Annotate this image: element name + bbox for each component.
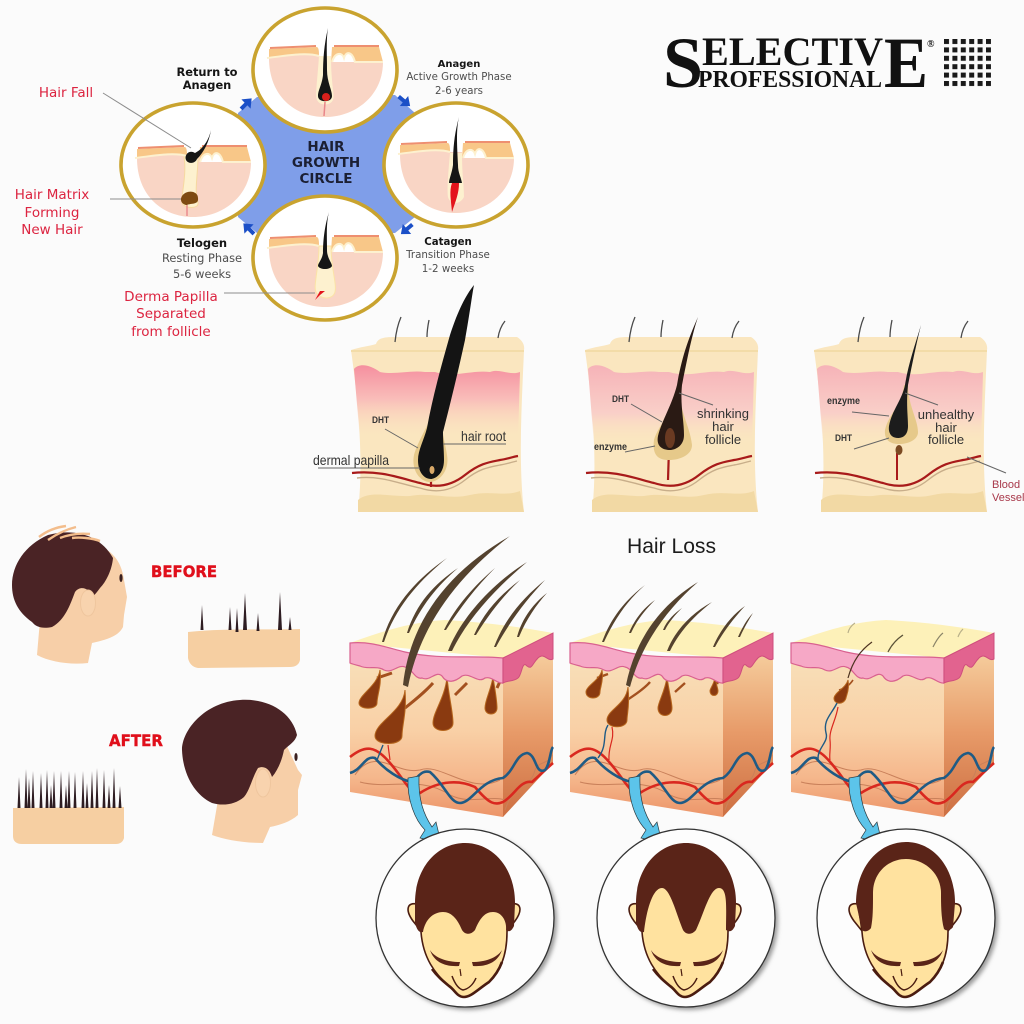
icon: skin sample with dense hair (13, 768, 124, 844)
panel: thinning hair skin block (570, 582, 773, 817)
labels: enzyme, DHT, unhealthy hair follicle, blood vessel: follicle (928, 432, 964, 447)
labels: enzyme, DHT, unhealthy hair follicle, blood vessel: Vessel (992, 492, 1024, 504)
label: catagen: Transition Phase (405, 249, 490, 261)
arrow: to catagen (394, 92, 414, 111)
logo: selective professional: ELECTIV (702, 29, 883, 74)
panel: balding skin block (791, 620, 994, 817)
label: return to anagen: Return to (176, 65, 238, 79)
labels: enzyme, DHT, unhealthy hair follicle, blood vessel: DHT (835, 433, 852, 443)
hair strands (848, 623, 963, 678)
label: hair matrix (15, 187, 181, 238)
labels: DHT, enzyme, shrinking hair follicle: DHT (612, 394, 629, 404)
labels: DHT, hair root, dermal papilla: DHT (372, 415, 389, 425)
panel: unhealthy follicle skin section (814, 317, 1024, 512)
icon: head with receding hairline (597, 829, 778, 1010)
label: return to anagen: Anagen (183, 78, 231, 92)
hair strands (382, 536, 547, 687)
labels: enzyme, DHT, unhealthy hair follicle, blood vessel: unhealthy (918, 407, 975, 422)
label: hair fall (39, 85, 191, 148)
arrow: to telogen (397, 220, 417, 239)
label: anagen: Active Growth Phase (406, 72, 512, 83)
logo: selective professional: S (663, 23, 703, 103)
arrow: return to anagen (236, 94, 256, 114)
panel: hair growth circle (15, 8, 528, 340)
icon: catagen circle (384, 103, 528, 227)
labels: enzyme, DHT, unhealthy hair follicle, blood vessel: Blood (992, 479, 1020, 491)
arrow: block one to head one (408, 776, 441, 843)
icon: anagen circle (253, 8, 397, 132)
arrow: block three to head three (849, 776, 882, 843)
central blue hub (238, 95, 415, 233)
icon: head after treatment (182, 700, 302, 843)
panel: shrinking follicle skin section (585, 317, 758, 512)
icon: head with early hair loss (376, 829, 557, 1010)
label: hair matrix: Forming (25, 205, 79, 221)
arrow: from telogen (239, 219, 259, 239)
label: telogen: 5-6 weeks (173, 267, 231, 281)
logo: selective professional: E (884, 23, 928, 103)
labels: DHT, enzyme, shrinking hair follicle: shrinking (697, 406, 749, 421)
center heading: CIRCLE (299, 171, 353, 187)
label: derma papilla: Separated (136, 306, 206, 322)
label: hair fall: Hair Fall (39, 85, 93, 101)
labels: DHT, enzyme, shrinking hair follicle (594, 393, 749, 453)
label: hair matrix: Hair Matrix (15, 187, 89, 203)
icon: telogen circle (253, 196, 397, 320)
label: catagen: 1-2 weeks (422, 263, 474, 275)
label: derma papilla (124, 289, 315, 340)
logo: selective professional: PROFESSIONAL (698, 67, 882, 93)
icon: skin sample with sparse hair (188, 592, 300, 668)
panel: healthy hair root skin section (313, 285, 524, 512)
icon: head before treatment (12, 526, 127, 664)
logo: selective professional: ® (927, 39, 935, 50)
label: after: AFTER (109, 731, 163, 750)
labels: DHT, hair root, dermal papilla: dermal papilla (313, 452, 389, 468)
label: telogen: Resting Phase (162, 251, 242, 265)
hair strands (602, 582, 753, 687)
label: derma papilla: Derma Papilla (124, 289, 218, 305)
label: before: BEFORE (151, 562, 217, 581)
label: derma papilla: from follicle (131, 324, 211, 340)
label: telogen: Telogen (177, 236, 227, 250)
labels: DHT, hair root, dermal papilla (313, 415, 506, 468)
labels: DHT, hair root, dermal papilla: hair root (461, 428, 506, 444)
center heading: HAIR (307, 139, 345, 155)
icon: head with advanced hair loss (817, 829, 998, 1010)
logo: selective professional (663, 23, 991, 103)
labels: DHT, enzyme, shrinking hair follicle: follicle (705, 432, 741, 447)
heading: hair loss: Hair Loss (627, 535, 716, 558)
labels: DHT, enzyme, shrinking hair follicle: enzyme (594, 442, 627, 453)
labels: enzyme, DHT, unhealthy hair follicle, blood vessel (827, 393, 1024, 504)
center heading: GROWTH (292, 155, 360, 171)
label: catagen: Catagen (424, 237, 472, 248)
label: anagen: 2-6 years (435, 86, 483, 97)
icon: return to anagen circle (121, 103, 265, 227)
arrow: block two to head two (629, 776, 662, 843)
label: anagen: Anagen (438, 59, 480, 70)
labels: enzyme, DHT, unhealthy hair follicle, blood vessel: enzyme (827, 396, 860, 407)
label: hair matrix: New Hair (21, 222, 83, 238)
labels: enzyme, DHT, unhealthy hair follicle, blood vessel: hair (935, 420, 958, 435)
panel: dense hair skin block (350, 536, 553, 817)
labels: DHT, enzyme, shrinking hair follicle: hair (712, 419, 735, 434)
